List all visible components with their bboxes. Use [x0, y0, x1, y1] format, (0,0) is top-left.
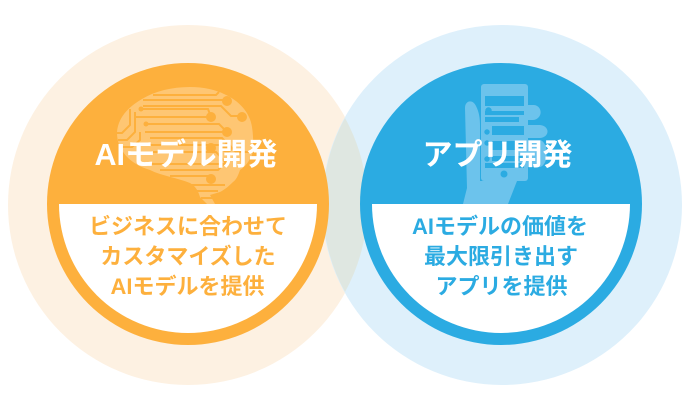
- panel: pale background circle right: [322, 25, 682, 385]
- overlap of the two pale circles: [323, 118, 367, 292]
- text: description: ビジネスに合わせて: [89, 214, 287, 239]
- text: description: AIモデルを提供: [110, 274, 265, 299]
- heading: AI model development: AIモデル開発: [94, 137, 278, 172]
- panel: app development: [360, 63, 642, 345]
- heading: app development: アプリ開発: [422, 139, 572, 172]
- text: description: [89, 214, 287, 299]
- text: description: カスタマイズした: [100, 244, 276, 269]
- text: description: 最大限引き出す: [424, 244, 578, 269]
- panel: pale background circle left: [8, 25, 368, 385]
- text: description: アプリを提供: [435, 274, 568, 299]
- white lower panel: [59, 204, 317, 333]
- icon: circuit brain: [117, 87, 253, 204]
- text: description: AIモデルの価値を: [412, 214, 588, 239]
- orange disc: [47, 63, 329, 345]
- panel: AI model development: [47, 63, 329, 345]
- text: description: [412, 214, 588, 299]
- blue disc: [360, 63, 642, 345]
- white lower panel: [372, 204, 630, 333]
- icon: hand holding phone: [463, 84, 548, 204]
